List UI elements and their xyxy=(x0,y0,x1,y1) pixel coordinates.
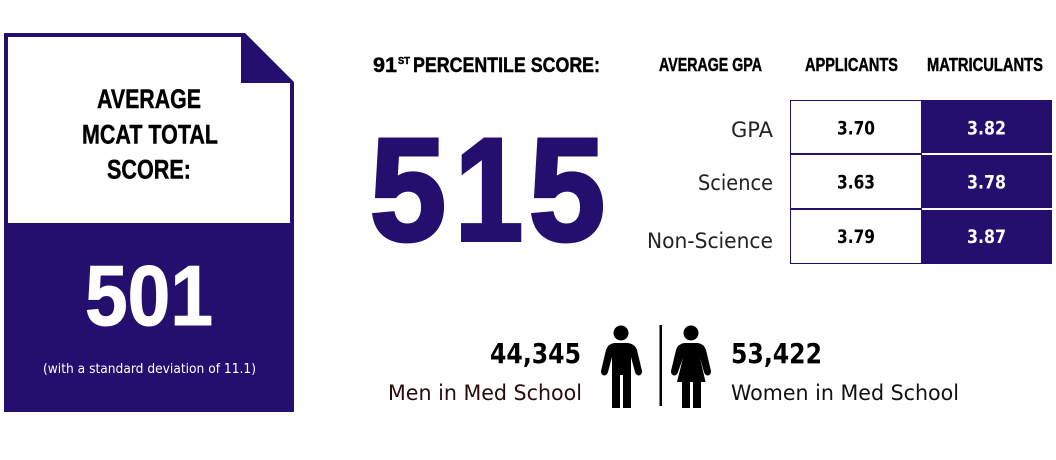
card heading: MCAT TOTAL xyxy=(82,120,218,150)
applicants column: 3.79 xyxy=(837,226,875,248)
percentile score value xyxy=(370,108,605,271)
table row labels: Science xyxy=(698,171,773,195)
table column headers xyxy=(659,55,1043,75)
table row labels: Non-Science xyxy=(647,229,773,253)
matriculants column xyxy=(922,100,1052,264)
men count: 44,345 xyxy=(490,337,581,370)
standard deviation note: (with a standard deviation of 11.1) xyxy=(43,362,256,377)
percentile heading: 91 xyxy=(373,54,397,77)
table column headers: AVERAGE GPA xyxy=(659,55,762,75)
divider between men and women xyxy=(660,325,662,406)
applicants column xyxy=(790,100,922,264)
panel: 91st percentile xyxy=(370,54,605,271)
applicants column: 3.70 xyxy=(837,118,875,140)
panel: GPA table xyxy=(647,55,1052,264)
card heading: SCORE: xyxy=(107,154,191,184)
card heading: AVERAGE xyxy=(97,84,201,114)
women label: Women in Med School xyxy=(731,381,959,405)
percentile heading: PERCENTILE SCORE: xyxy=(413,54,600,77)
women count: 53,422 xyxy=(731,337,822,370)
average score value: 501 xyxy=(85,249,213,344)
percentile score value: 5 xyxy=(370,108,446,271)
percentile score value: 5 xyxy=(529,108,605,271)
icon: woman xyxy=(671,326,711,408)
matriculants column: 3.82 xyxy=(967,118,1006,140)
matriculants column: 3.87 xyxy=(967,226,1006,248)
matriculants column: 3.78 xyxy=(967,172,1006,194)
applicants column: 3.63 xyxy=(837,172,875,194)
card heading xyxy=(82,84,218,184)
table row labels: GPA xyxy=(731,118,774,142)
men label: Men in Med School xyxy=(388,381,582,405)
panel: average MCAT card xyxy=(4,33,294,412)
table column headers: APPLICANTS xyxy=(805,55,898,75)
card white header area xyxy=(8,37,290,223)
icon: man xyxy=(601,326,642,408)
percentile score value: 1 xyxy=(455,108,523,271)
card outline xyxy=(4,33,294,412)
percentile heading: ST xyxy=(398,56,410,67)
panel: men and women counts xyxy=(388,325,959,408)
table row labels xyxy=(647,118,774,253)
